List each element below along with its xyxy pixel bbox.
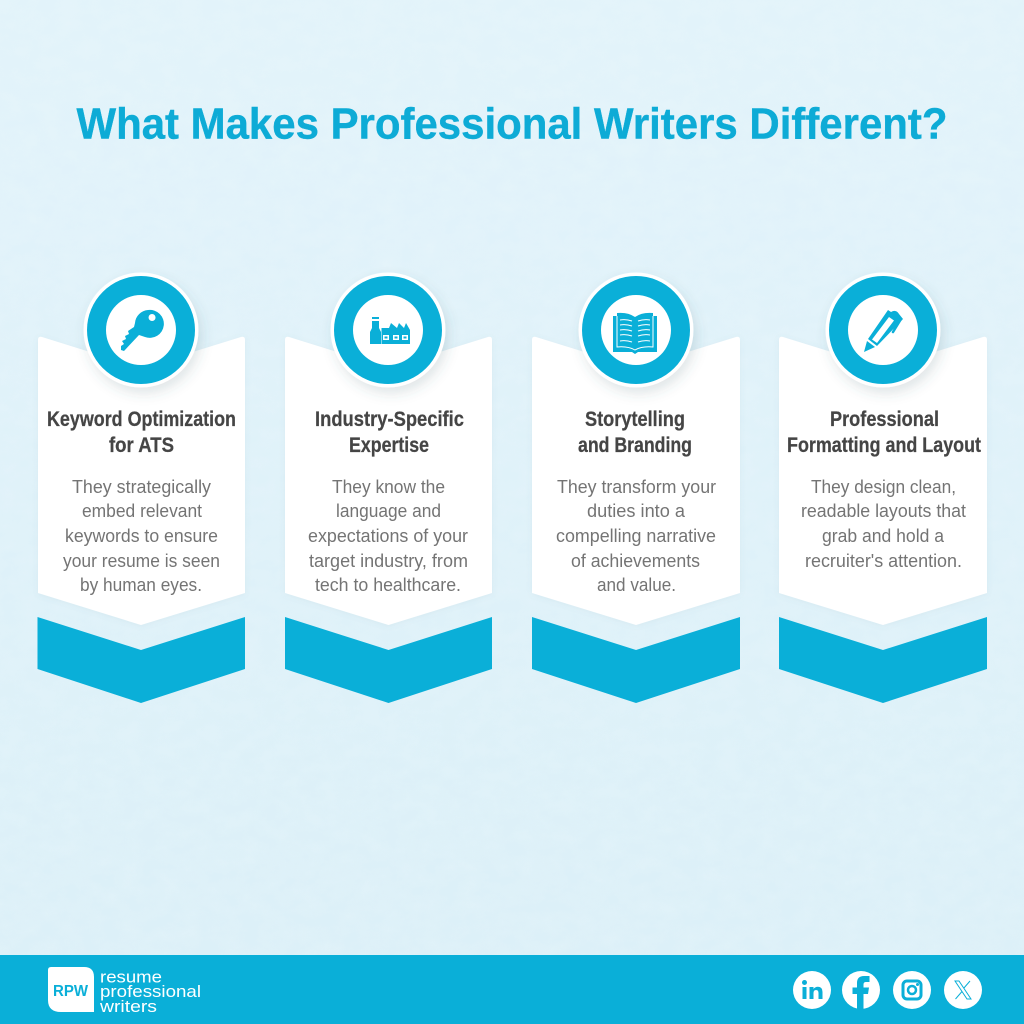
logo: RPW: [53, 983, 89, 1000]
icon: pen: [864, 310, 903, 352]
body text: They know the: [332, 477, 445, 497]
badge circle: [84, 272, 198, 388]
body text: They strategically: [72, 477, 211, 497]
icon: instagram: [893, 971, 931, 1009]
heading: for ATS: [109, 434, 174, 457]
body text: recruiter's attention.: [805, 551, 962, 571]
icon: factory: [370, 317, 410, 344]
panel: industry expertise: [285, 272, 492, 703]
body text: They design clean,: [811, 477, 956, 497]
body text: and value.: [597, 575, 676, 595]
panel: keyword optimization: [38, 272, 245, 703]
icon: linkedin: [793, 971, 831, 1009]
heading: [578, 408, 692, 457]
logo: writers: [99, 997, 157, 1016]
card background: [285, 337, 492, 625]
logo: [48, 967, 201, 1016]
card background: [532, 337, 740, 625]
body text: readable layouts that: [801, 501, 966, 521]
heading: [315, 408, 464, 457]
body text: tech to healthcare.: [315, 575, 461, 595]
body text: [556, 477, 716, 595]
title: What Makes Professional Writers Different?: [76, 100, 948, 148]
panel: storytelling: [532, 272, 740, 703]
body text: compelling narrative: [556, 526, 716, 546]
heading: Storytelling: [585, 408, 685, 431]
body text: keywords to ensure: [65, 526, 218, 546]
body text: by human eyes.: [80, 575, 202, 595]
icon: open book: [613, 313, 657, 354]
badge circle: [330, 272, 446, 388]
heading: Expertise: [349, 434, 429, 457]
icon: key: [121, 310, 164, 351]
heading: Formatting and Layout: [787, 434, 981, 457]
logo: professional: [100, 982, 201, 1001]
body text: duties into a: [587, 501, 686, 521]
chevron: [285, 617, 492, 703]
badge circle: [826, 272, 940, 388]
chevron: [532, 617, 740, 703]
card background: [38, 337, 245, 625]
chevron: [779, 617, 987, 703]
card background: [779, 337, 987, 625]
heading: [47, 408, 236, 457]
body text: [801, 477, 966, 571]
logo: resume: [100, 968, 162, 986]
heading: Keyword Optimization: [47, 408, 236, 431]
icon: x: [944, 971, 982, 1009]
heading: Industry-Specific: [315, 408, 464, 431]
body text: language and: [336, 501, 441, 521]
panel: formatting: [779, 272, 987, 703]
chevron: [38, 617, 245, 703]
body text: [308, 477, 468, 595]
body text: They transform your: [557, 477, 716, 497]
body text: embed relevant: [82, 501, 202, 521]
body text: grab and hold a: [822, 526, 945, 546]
body text: your resume is seen: [63, 551, 220, 571]
footer band: [0, 955, 1024, 1024]
body text: [63, 477, 220, 595]
body text: expectations of your: [308, 526, 468, 546]
body text: of achievements: [571, 551, 700, 571]
heading: [787, 408, 981, 457]
heading: and Branding: [578, 434, 692, 457]
icon: facebook: [842, 971, 880, 1009]
heading: Professional: [830, 408, 939, 431]
badge circle: [578, 272, 694, 388]
body text: target industry, from: [309, 551, 468, 571]
